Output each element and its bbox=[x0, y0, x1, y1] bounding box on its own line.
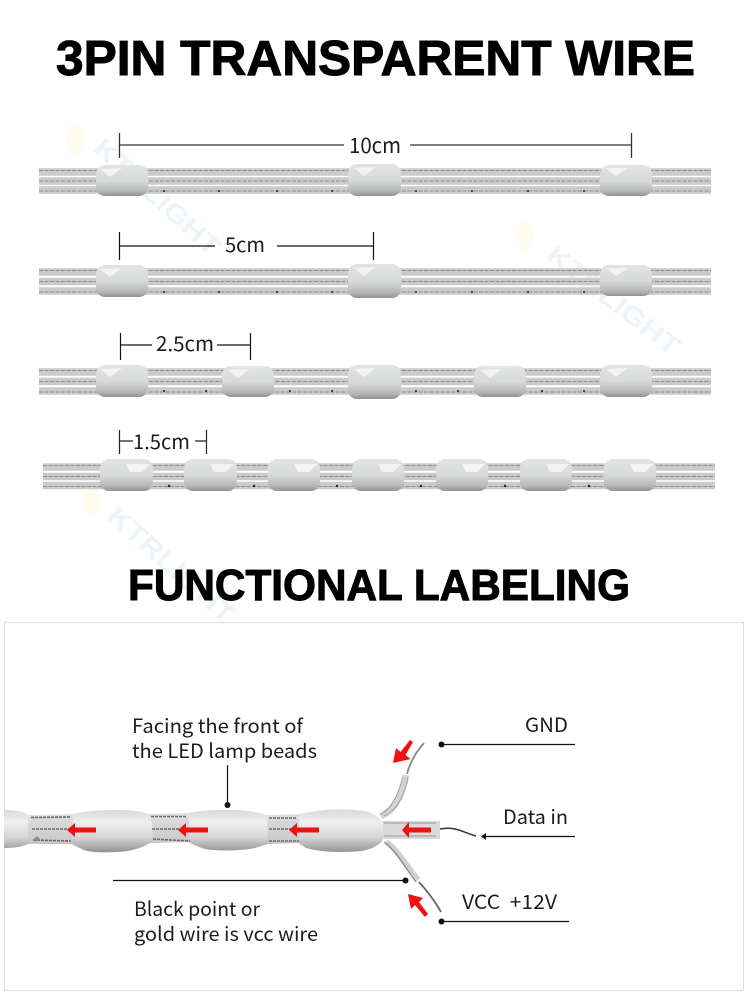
callout: VCC +12V bbox=[438, 886, 569, 924]
LED beads bbox=[96, 264, 652, 298]
bead highlights bbox=[100, 167, 628, 177]
solder points bbox=[163, 291, 585, 293]
bead highlights bbox=[126, 464, 653, 472]
solder points bbox=[168, 485, 590, 487]
callout: Facing the front bbox=[132, 710, 317, 808]
wire body bbox=[4, 809, 386, 852]
dimension: 10cm bbox=[120, 130, 632, 160]
watermark: KTRLIGHT logos: KTRLIGHT bbox=[102, 500, 241, 630]
dimension: 1.5cm: 1.5cm bbox=[133, 426, 190, 455]
panel: functional labeling diagram bbox=[4, 622, 744, 990]
strip row 4: 1.5cm spacing bbox=[43, 459, 715, 491]
wire strands bbox=[39, 170, 711, 191]
arrow 4 bbox=[402, 822, 431, 838]
bead highlights bbox=[100, 267, 628, 277]
wire strands bbox=[39, 370, 711, 392]
title: 3PIN TRANSPARENT WIRE: 3PIN TRANSPARENT WIRE bbox=[56, 32, 695, 86]
watermark: KTRLIGHT logos: KTRLIGHT bbox=[88, 132, 227, 262]
watermark: KTRLIGHT logos: KTRLIGHT bbox=[541, 239, 686, 361]
wire strands bbox=[39, 270, 711, 292]
callout: Black point: gold wire is vcc wire bbox=[134, 918, 318, 947]
dimension: 2.5cm: 2.5cm bbox=[156, 328, 214, 357]
lead: GND wire bbox=[380, 743, 424, 816]
callout: GND bbox=[438, 709, 575, 748]
callout: Data in: Data in bbox=[503, 801, 568, 830]
arrow 2 bbox=[178, 823, 208, 837]
tube silhouette bbox=[4, 809, 386, 852]
arrow 6: VCC bbox=[408, 894, 428, 917]
LED beads bbox=[96, 365, 652, 399]
callout: GND: GND bbox=[525, 709, 568, 738]
dimension: 5cm: 5cm bbox=[225, 229, 265, 258]
callout: VCC +12V: VCC +12V bbox=[462, 886, 558, 915]
dimension: 1.5cm bbox=[120, 426, 206, 455]
exposed strands bbox=[28, 815, 300, 844]
wire strands bbox=[43, 466, 715, 486]
red arrows bbox=[67, 740, 431, 917]
callout: Facing the front: the LED lamp beads bbox=[132, 735, 317, 764]
callout: Facing the front: Facing the front of bbox=[132, 710, 304, 739]
solder points bbox=[163, 190, 585, 192]
dimension: 5cm bbox=[120, 229, 374, 260]
solder points bbox=[163, 390, 585, 392]
heading: FUNCTIONAL LABELING: FUNCTIONAL LABELING bbox=[128, 561, 630, 610]
arrow 1 bbox=[67, 823, 96, 837]
strip row 3: 2.5cm spacing bbox=[39, 365, 711, 399]
callout: Data in bbox=[481, 801, 575, 840]
dimension: 2.5cm bbox=[120, 328, 250, 360]
strip row 1: 10cm spacing bbox=[39, 164, 711, 196]
arrow 3 bbox=[289, 823, 319, 837]
arrow 5: GND bbox=[393, 740, 413, 763]
lead: VCC wire bbox=[384, 842, 441, 912]
LED beads bbox=[100, 459, 656, 491]
LED beads bbox=[96, 164, 652, 196]
dimension: 10cm: 10cm bbox=[349, 130, 401, 160]
panel border bbox=[4, 622, 744, 990]
watermark: KTRLIGHT logos bbox=[66, 124, 686, 630]
bead highlights bbox=[100, 368, 628, 378]
callout: Black point bbox=[113, 878, 408, 947]
lead: Data in wire bbox=[383, 821, 476, 839]
callout: Black point: Black point or bbox=[134, 893, 260, 922]
strip row 2: 5cm spacing bbox=[39, 264, 711, 298]
